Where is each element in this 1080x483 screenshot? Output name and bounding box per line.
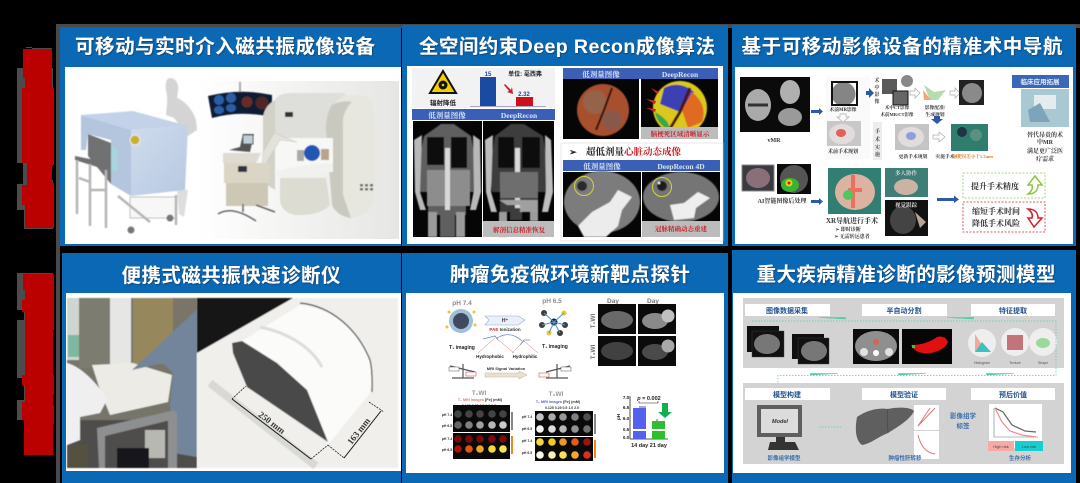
heading: 全空间约束Deep Recon成像算法 [419,35,715,58]
dose reduction chart: 2.32 [518,92,530,98]
dimension: 163 mm: 163 mm [345,416,372,446]
T1 phantom grid: pH 6.5 [442,424,452,428]
panel: radiomics prediction model [732,250,1076,483]
dimension: 250 mm [232,386,328,459]
surgical workflow: 术前MR影像 [829,106,857,113]
T1 phantom grid: T₁ MRI images [Fe] (mM) [458,398,503,402]
multi-user collaboration and visual tracking: 多人协作 [895,169,917,177]
XR navigation photo: ➢ 无需转运患者 [834,233,870,240]
illustration: interventional MRI system [208,82,375,221]
signal balance diagram [449,364,571,379]
mouse MRI images: Day [647,298,659,305]
pH bar chart: pH [616,414,621,420]
block: upper pipeline [743,298,1064,368]
T1 phantom grid: T₁WI [472,390,486,397]
cardiac imaging box: ➢ [569,147,577,157]
AI image post-processing: AI智能图像后处理 [758,197,806,205]
signal balance diagram: MRI Signal Variation [487,366,526,371]
illustration: portable scanner with operator [75,78,197,234]
AI image post-processing [742,164,811,205]
clinical extension [1012,75,1069,163]
probe mechanism diagram: pH 7.4 [452,300,472,307]
whole body comparison: 解剖信息精准恢复 [493,225,546,234]
surgical workflow: 实 [875,144,881,151]
heading: 肿瘤免疫微环境新靶点探针 [450,263,690,286]
step: feature extraction: Texture [1009,361,1021,365]
heading: 重大疾病精准诊断的影像预测模型 [756,263,1056,286]
heading: 基于可移动影像设备的精准术中导航 [742,35,1063,58]
cardiac imaging box: 超低剂量心脏动态成像 [586,146,682,158]
callout: accuracy [963,173,1045,198]
surgical workflow: 术 [874,77,880,84]
callout: time and risk [963,202,1045,232]
surgical workflow: 中 [874,84,880,91]
mouse MRI images [590,298,676,366]
surgical workflow: 术前MR/CT影像 [880,111,914,118]
T1 phantom grid: 0.125 0.25 0.5 1.0 2.0 [462,404,496,408]
surgical workflow: 实施手术 [935,153,955,160]
clinical extension: 临床应用拓展 [1020,77,1060,86]
side label: row two (illegible in reference, drawn as a shape) [17,273,54,455]
photo background [198,81,399,239]
probe mechanism diagram [446,298,568,359]
surgical workflow: 影像配准/ [925,104,946,111]
clinical extension: 中MR [1037,138,1054,146]
cardiac imaging box [561,143,723,241]
pH bar chart: 14 day 21 day [631,443,668,449]
step: model validation: 肿瘤性肝转移 [888,454,922,462]
step: model validation: 标签 [956,421,970,430]
panel: portable MRI diagnostic [62,253,401,483]
icon: arrow to XR [811,198,823,205]
heading: 便携式磁共振快速诊断仪 [122,264,341,287]
callout: time and risk: 降低手术风险 [972,218,1020,228]
dose reduction chart [412,68,555,108]
step: prognostic value [971,388,1055,462]
probe mechanism diagram: Hydrophilic [513,354,538,359]
whole body comparison: 低剂量图像 [428,110,466,120]
XR navigation photo: ➢ 即时诊断 [835,226,861,233]
step: model building [745,388,841,462]
clinical extension: 替代昂贵的术 [1027,131,1063,139]
surgical workflow: 术中CT影像 [885,104,910,111]
heading: 可移动与实时介入磁共振成像设备 [75,35,375,58]
pH bar chart: 0.0 [623,435,630,440]
surgical workflow: 融靶误差小于1.7mm [953,153,993,160]
surgical workflow: 影 [874,91,880,98]
step: prognostic value: 预后价值 [999,390,1027,399]
surgical workflow: 术 [875,136,880,143]
mouse MRI images: Day [607,298,619,305]
step: prognostic value: Low risk [1022,444,1036,449]
step: semi-automatic segmentation: 半自动分割 [886,306,922,315]
step: feature extraction: Shape [1038,361,1048,365]
step: prognostic value: 生存分析 [1009,454,1031,462]
T1 phantom grid: pH 7.4 [442,437,452,441]
pH bar chart [616,395,672,449]
dimension: 163 mm [328,402,384,458]
pH bar chart: 0.5 [623,427,630,432]
mouse MRI images: T₁WI [590,314,597,328]
probe mechanism diagram: Hydrophobic [476,354,504,359]
T2 phantom grid: pH 7.4 [522,415,532,419]
T1 phantom grid [442,390,513,459]
T2 phantom grid: T₂WI [549,391,564,398]
clinical extension: 满足更广泛医 [1027,147,1063,155]
dose reduction chart: 15 [485,72,492,78]
T1 phantom grid: pH 6.5 [442,448,452,452]
multi-user collaboration and visual tracking [885,168,928,236]
block: lower pipeline [743,383,1064,464]
surgical workflow: 生成规划 [925,111,945,118]
dose reduction chart: 辐射降低 [430,98,456,107]
step: semi-automatic segmentation [853,304,952,364]
side label: row one (illegible in reference, drawn as a shape) [17,47,54,229]
cardiac imaging box: 冠脉精确动态重建 [655,224,708,233]
step: model validation: 影像组学 [950,411,976,420]
clinical extension: 疗需求 [1036,155,1054,163]
T2 phantom grid: pH 6.5 [522,427,532,431]
step: feature extraction: 特征提取 [999,306,1027,315]
pH bar chart: 6.5 [623,405,630,410]
brain perfusion comparison: DeepRecon [662,70,699,79]
mouse MRI images: T₂WI [590,344,597,359]
step: prognostic value: High risk [993,444,1009,449]
callout: accuracy: 提升手术精度 [971,181,1019,191]
step: model building: 影像组学模型 [767,454,801,462]
step: feature extraction: Histogram [974,361,990,365]
XR navigation photo: XR导航进行手术 [826,216,878,225]
step: data acquisition [745,304,830,364]
step: model building: 模型构建 [773,390,801,399]
pH bar chart: p = 0.002 [636,396,661,402]
panel: mobile interventional MRI [60,27,401,246]
icon: arrow to outcomes [937,196,959,203]
step: model building: Model [772,419,788,425]
probe mechanism diagram: H⁺ [502,318,508,324]
vMR brain views [740,77,810,144]
panel: surgical navigation [732,25,1076,246]
icon: radiation warning [430,71,456,93]
dose reduction chart: 单位: 毫西弗 [508,70,542,78]
T2 phantom grid [522,391,596,461]
whole body comparison [412,109,555,237]
T2 phantom grid: pH 7.4 [522,439,532,443]
icon: green down arrow [658,403,672,418]
T1 phantom grid: pH 7.4 [442,413,452,417]
photo: device on cart [67,298,197,468]
brain perfusion comparison: 低剂量图像 [582,69,620,79]
T2 phantom grid: pH 6.5 [522,451,532,455]
T2 phantom grid: 0.125 0.25 0.5 1.0 2.0 [545,406,579,410]
whole body comparison: DeepRecon [501,111,538,120]
pH bar chart: 7.0 [623,395,630,400]
icon: arrow to pre-op [811,108,823,115]
surgical workflow: 更新手术规划 [899,153,928,160]
T2 phantom grid: T₂ MRI images [Fe] (mM) [536,400,581,404]
surgical workflow [826,75,993,160]
photo: scanner with dimensions [197,298,398,468]
step: data acquisition: 图像数据采集 [766,306,808,315]
probe mechanism diagram: pH 6.5 [542,298,562,305]
callout: time and risk: 缩短手术时间 [972,206,1020,216]
surgical workflow: 施 [875,151,880,158]
surgical workflow: 手 [875,128,880,135]
cardiac imaging box: DeepRecon 4D [657,162,705,171]
probe mechanism diagram: PAE Ionization [489,327,521,332]
dimension: 250 mm: 250 mm [257,409,287,436]
XR navigation photo [826,168,881,240]
surgical workflow: 术前手术规划 [828,148,858,155]
surgical workflow: 像 [874,98,880,105]
step: model validation [856,388,976,462]
probe mechanism diagram: T₁ imaging [449,345,475,351]
probe mechanism diagram: T₁ imaging [542,344,568,350]
panel: tumor immune microenvironment probe [402,253,728,483]
multi-user collaboration and visual tracking: 视觉跟踪 [895,201,917,209]
brain perfusion comparison [563,68,718,139]
step: feature extraction [968,304,1057,365]
brain perfusion comparison: 脑梗死区域清晰显示 [651,129,710,138]
panel: Deep Recon algorithm [402,25,728,246]
step: model validation: 模型验证 [890,390,918,399]
flow connectors [752,318,1056,387]
cardiac imaging box: 低剂量图像 [583,161,621,171]
pH bar chart: 6.0 [623,416,630,421]
vMR brain views: vMR [768,138,781,144]
